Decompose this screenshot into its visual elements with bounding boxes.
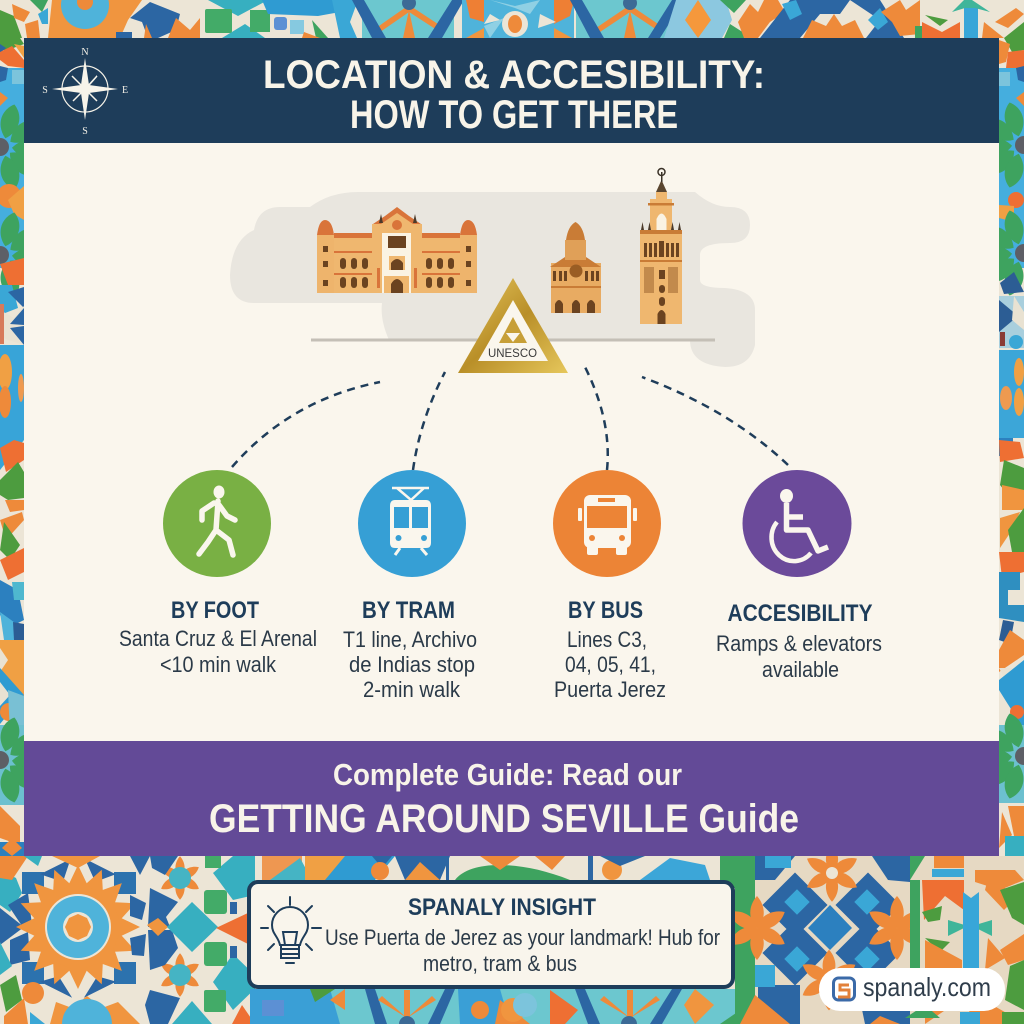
icon: compass rose <box>42 47 128 137</box>
label: by bus: BY BUS <box>568 597 643 624</box>
label: by tram <box>343 597 477 702</box>
label: by bus <box>554 597 666 702</box>
title <box>263 53 765 137</box>
dashed route lines <box>232 365 788 470</box>
palace <box>317 207 477 293</box>
icon: compass rose: S <box>42 85 48 96</box>
banner: complete guide: Complete Guide: Read our <box>333 757 682 792</box>
label: accesibility: available <box>762 657 839 682</box>
illustration: Seville landmarks <box>230 168 755 373</box>
label: by bus: Puerta Jerez <box>554 677 666 702</box>
icon: compass rose: S <box>82 126 88 137</box>
label: accesibility: ACCESIBILITY <box>728 600 872 627</box>
callout: Spanaly insight <box>249 882 733 987</box>
bottom left tiles <box>0 856 262 1024</box>
top strip tiles <box>0 0 1024 38</box>
Giralda tower <box>640 168 682 324</box>
bottom right tiles <box>726 844 1024 1024</box>
panel: cream content area <box>24 143 999 741</box>
icon: compass rose: E <box>122 85 128 96</box>
icon: wheelchair <box>742 470 852 577</box>
logo: spanaly.com badge: spanaly.com <box>863 972 991 1002</box>
header band <box>24 38 999 143</box>
title: HOW TO GET THERE <box>350 93 678 137</box>
label: by tram: 2-min walk <box>363 677 461 702</box>
callout: Spanaly insight: SPANALY INSIGHT <box>408 894 596 921</box>
label: by bus: 04, 05, 41, <box>565 652 656 677</box>
banner: complete guide <box>24 741 999 856</box>
badge: UNESCO: UNESCO <box>488 348 537 360</box>
icon: tram <box>358 470 466 577</box>
label: by bus: Lines C3, <box>567 627 647 652</box>
left side tiles <box>0 38 48 856</box>
label: by foot: BY FOOT <box>171 597 259 624</box>
cathedral <box>550 222 601 313</box>
callout: Spanaly insight: metro, tram & bus <box>423 951 577 976</box>
map blob <box>230 192 755 367</box>
right side tiles <box>976 38 1024 856</box>
label: by foot <box>119 597 317 677</box>
label: by tram: de Indias stop <box>349 652 475 677</box>
icon: walking person <box>163 470 271 577</box>
label: accesibility <box>716 600 882 682</box>
horizon line <box>311 338 715 342</box>
title: LOCATION & ACCESIBILITY: <box>263 53 765 97</box>
banner: complete guide: GETTING AROUND SEVILLE Guide <box>209 797 799 841</box>
bottom middle tiles <box>250 856 755 1024</box>
label: by tram: T1 line, Archivo <box>343 627 477 652</box>
label: by foot: Santa Cruz & El Arenal <box>119 626 317 651</box>
icon: light bulb <box>261 897 321 963</box>
label: accesibility: Ramps & elevators <box>716 631 882 656</box>
icon: compass rose: N <box>81 47 89 58</box>
icon: bus <box>553 470 661 577</box>
logo: spanaly.com badge <box>819 968 1005 1011</box>
label: by tram: BY TRAM <box>362 597 455 624</box>
callout: Spanaly insight: Use Puerta de Jerez as your landmark! Hub for <box>325 925 720 950</box>
label: by foot: <10 min walk <box>160 652 277 677</box>
badge: UNESCO <box>458 278 568 373</box>
